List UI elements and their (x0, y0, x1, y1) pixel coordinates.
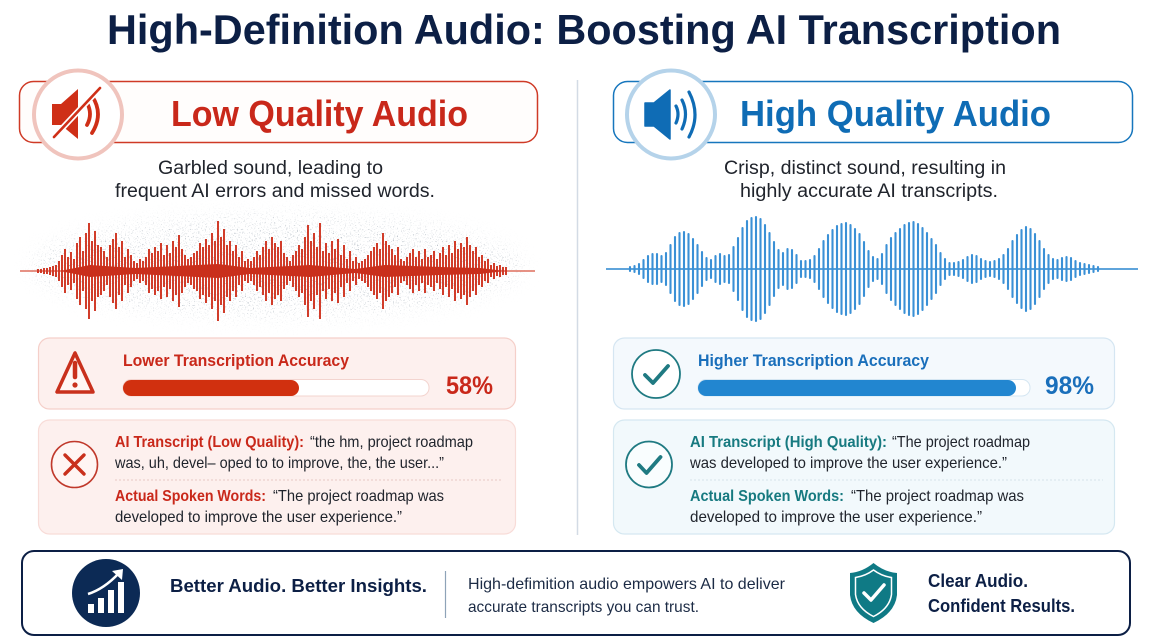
panel: footer takeaway (22, 551, 1130, 635)
spoken words text: low quality: “The project roadmap was (273, 488, 444, 505)
spoken words text: low quality (115, 488, 444, 526)
chart: noisy red waveform (20, 204, 535, 328)
footer tagline (928, 571, 1075, 616)
footer tagline: Confident Results. (928, 596, 1075, 616)
description: low quality (115, 158, 435, 202)
header: low quality audio: Low Quality Audio (171, 93, 468, 134)
icon: warning triangle (57, 353, 93, 392)
spoken words text: high quality: “The project roadmap was (851, 488, 1024, 505)
header: low quality audio (20, 82, 538, 142)
panel: high quality audio (606, 70, 1138, 534)
footer message: High-defimition audio empowers AI to deliver (468, 576, 786, 593)
footer tagline: Clear Audio. (928, 571, 1028, 591)
transcript text: low quality: AI Transcript (Low Quality): (115, 434, 304, 451)
panel: low quality transcript (38, 420, 516, 534)
spoken words text: low quality: Actual Spoken Words: (115, 488, 266, 505)
spoken words text: high quality: developed to improve the user experience.” (690, 509, 982, 526)
spoken words text: high quality (690, 488, 1024, 526)
footer message (468, 576, 786, 616)
progress bar: 98 percent (698, 380, 1030, 396)
transcript text: high quality: AI Transcript (High Quality): (690, 434, 887, 451)
icon: error cross (52, 442, 98, 488)
panel: high quality transcript (614, 420, 1114, 534)
progress bar: 58 percent (123, 380, 429, 396)
icon: teal check circle (626, 442, 672, 488)
footer heading: Better Audio. Better Insights. (170, 575, 427, 596)
panel: higher accuracy (614, 338, 1114, 409)
icon: muted speaker (34, 70, 122, 158)
label: higher transcription accuracy: Higher Transcription Accuracy (698, 352, 930, 370)
spoken words text: high quality: Actual Spoken Words: (690, 488, 844, 505)
label: lower transcription accuracy: Lower Transcription Accuracy (123, 352, 350, 370)
value: 98 percent: 98% (1045, 372, 1094, 400)
icon: check circle (632, 350, 680, 398)
chart: clean blue waveform (606, 217, 1138, 321)
footer message: accurate transcripts you can trust. (468, 599, 699, 616)
description: high quality: Crisp, distinct sound, resulting in (724, 158, 1006, 179)
spoken words text: low quality: developed to improve the user experience.” (115, 509, 402, 526)
value: 58 percent: 58% (446, 372, 493, 400)
transcript text: low quality: “the hm, project roadmap (310, 434, 473, 451)
description: high quality (724, 158, 1006, 202)
description: low quality: Garbled sound, leading to (158, 158, 383, 179)
header: high quality audio (614, 82, 1132, 142)
transcript text: low quality: was, uh, devel– oped to to improve, the, the user...” (114, 455, 444, 472)
icon: speaker (627, 70, 715, 158)
title: High-Definition Audio: Boosting AI Transcription (107, 6, 1061, 53)
description: low quality: frequent AI errors and missed words. (115, 181, 435, 202)
icon: growth chart (72, 559, 140, 627)
panel: lower accuracy (38, 338, 516, 409)
description: high quality: highly accurate AI transcripts. (740, 181, 998, 202)
icon: shield check (850, 563, 897, 623)
transcript text: high quality (689, 434, 1030, 472)
transcript text: high quality: “The project roadmap (892, 434, 1030, 451)
panel: low quality audio (5, 70, 550, 534)
header: high quality audio: High Quality Audio (740, 93, 1051, 134)
transcript text: high quality: was developed to improve the user experience.” (689, 455, 1007, 472)
transcript text: low quality (114, 434, 473, 472)
